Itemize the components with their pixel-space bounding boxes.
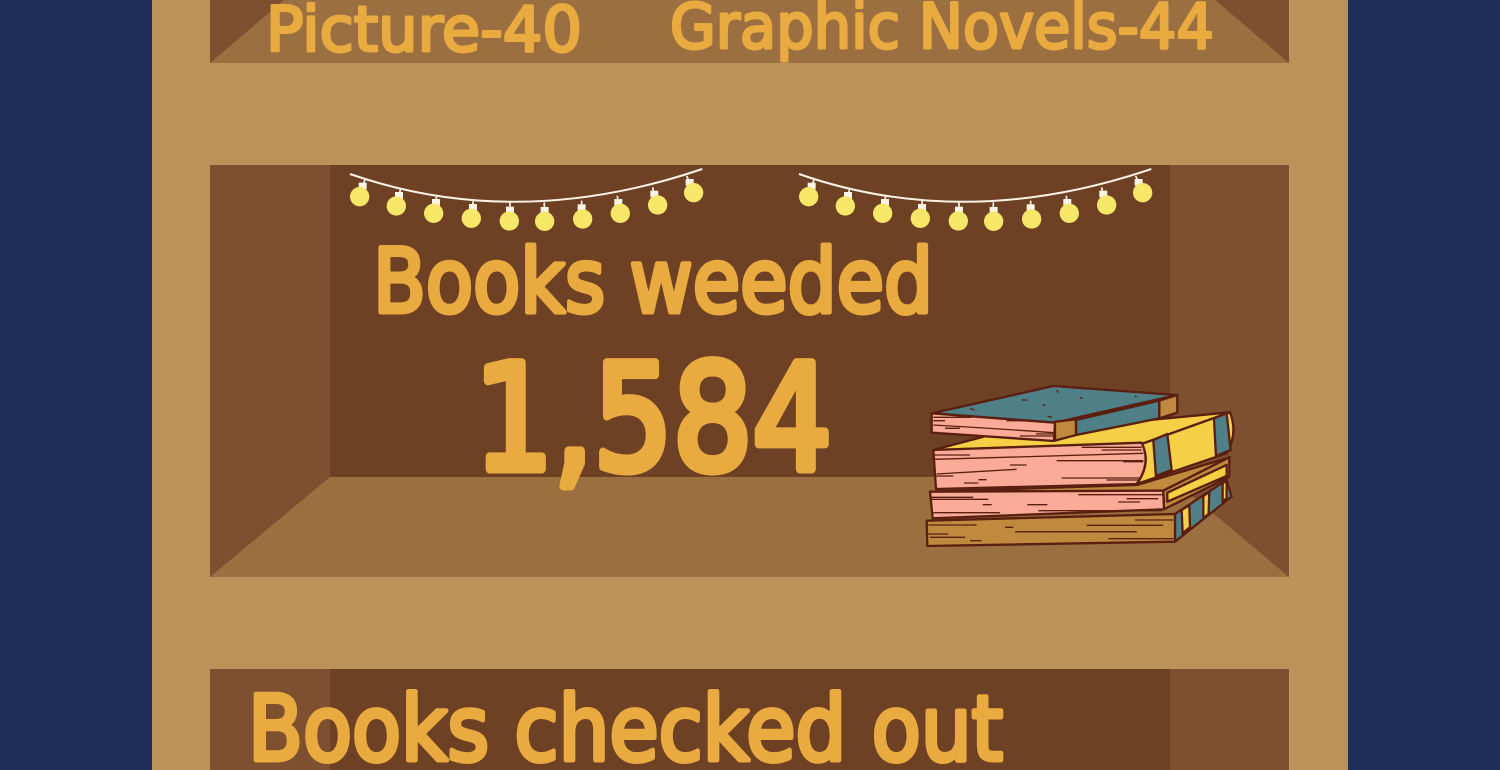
third book bbox=[930, 457, 1230, 518]
string lights right bbox=[799, 169, 1152, 231]
bottom book bbox=[927, 480, 1232, 546]
middle shelf compartment bbox=[210, 165, 1289, 577]
bottom shelf compartment bbox=[210, 669, 1289, 770]
heading: books weeded: Books weeded bbox=[373, 230, 933, 333]
number: 1,584: 1,584 bbox=[474, 334, 832, 504]
string lights left bbox=[350, 169, 703, 231]
icon: stack of books bbox=[927, 386, 1233, 546]
top teal book bbox=[932, 386, 1177, 441]
yellow book bbox=[933, 412, 1233, 489]
bookshelf frame bbox=[152, 0, 1348, 770]
top shelf compartment bbox=[210, 0, 1289, 63]
